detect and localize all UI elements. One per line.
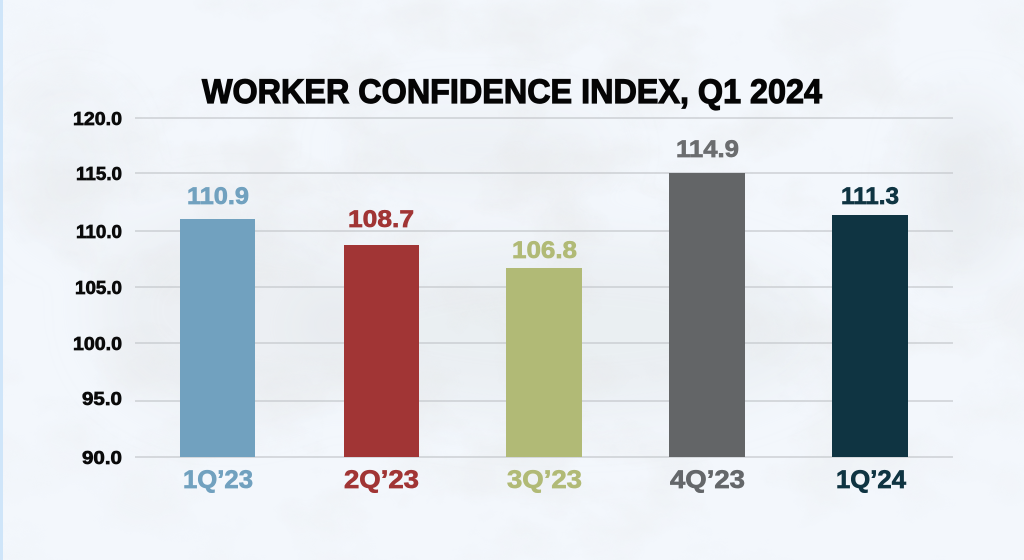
y-axis labels: 100.0 <box>73 334 122 354</box>
y-axis labels: 90.0 <box>82 448 122 468</box>
bar: 1Q'23 <box>180 183 255 494</box>
title: WORKER CONFIDENCE INDEX, Q1 2024 <box>202 73 822 111</box>
bar: 3Q'23: 106.8 <box>512 237 577 264</box>
y-axis labels: 105.0 <box>75 278 122 298</box>
bar: 4Q'23: 4Q’23 <box>670 466 745 494</box>
bar: 1Q'24 <box>832 183 908 494</box>
chart gridlines <box>135 118 953 457</box>
bar: 1Q'23: 110.9 <box>187 183 249 210</box>
bar: 3Q'23 <box>506 237 582 494</box>
bar: 2Q'23: 2Q’23 <box>344 466 419 494</box>
bar chart: worker confidence index by quarter <box>73 109 953 494</box>
y-axis labels <box>73 109 122 468</box>
bar: 1Q'24: 1Q’24 <box>836 466 906 494</box>
bar: 1Q'23: 1Q’23 <box>183 466 253 494</box>
y-axis labels: 120.0 <box>73 109 122 129</box>
bar: 1Q'24: 111.3 <box>841 183 899 210</box>
y-axis labels: 115.0 <box>76 164 122 184</box>
bar: 2Q'23 <box>344 206 419 494</box>
bar: 4Q'23: 114.9 <box>676 136 739 163</box>
y-axis labels: 95.0 <box>82 389 122 409</box>
bar: 3Q'23: 3Q’23 <box>507 466 582 494</box>
y-axis labels: 110.0 <box>76 222 122 242</box>
bar: 2Q'23: 108.7 <box>348 206 414 233</box>
bar: 4Q'23 <box>669 136 745 494</box>
